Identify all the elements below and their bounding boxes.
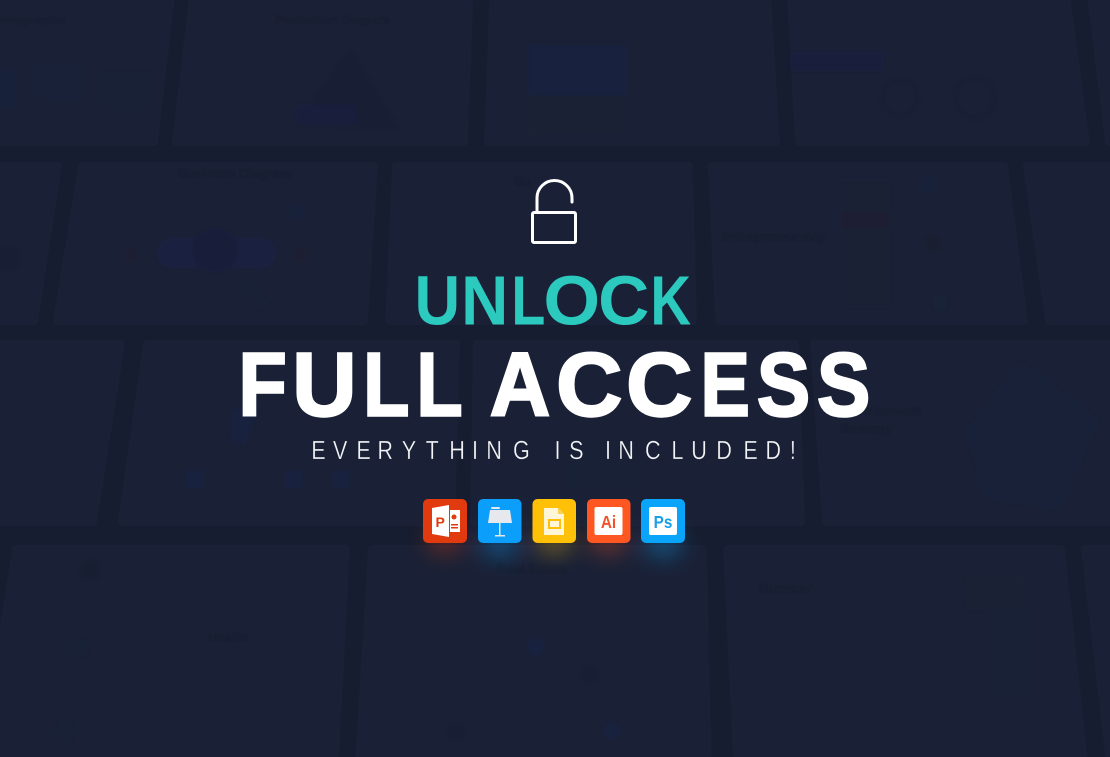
faint slide headings	[0, 13, 922, 645]
heading: full access: U	[292, 334, 356, 435]
faint slide headings: Strategy	[840, 421, 893, 436]
heading: unlock: K	[650, 262, 691, 340]
subheading: EVERYTHING IS INCLUDED!	[311, 437, 796, 465]
icon: Photoshop: Ps	[654, 512, 672, 532]
icon glows	[425, 529, 683, 559]
heading: full access: S	[817, 335, 870, 436]
heading: unlock: U	[415, 263, 460, 340]
heading: full access: F	[239, 334, 287, 435]
faint slide headings: Infographic	[0, 13, 66, 27]
heading: full access: C	[556, 335, 622, 435]
heading: full access: E	[701, 336, 750, 435]
faint slide headings: Number	[759, 580, 812, 596]
heading: unlock: C	[598, 261, 649, 339]
faint slide headings: Development	[840, 403, 922, 418]
heading: unlock: O	[543, 262, 600, 340]
faint slide headings: Business Diagram	[178, 166, 291, 181]
heading: full access: L	[416, 334, 463, 435]
faint slide headings: Health	[208, 630, 248, 645]
heading: full access	[238, 334, 870, 436]
icon: open padlock	[532, 181, 576, 242]
faint slide headings: Production Diagram	[275, 13, 390, 27]
faint slide headings: Entrepreneurship	[721, 230, 826, 244]
heading: unlock: L	[511, 262, 545, 340]
heading: full access: C	[626, 335, 692, 435]
heading: unlock	[415, 261, 691, 340]
icon: Keynote	[478, 499, 522, 543]
icon: Illustrator: Ai	[601, 512, 616, 532]
heading: full access: L	[363, 334, 409, 435]
heading: full access: A	[490, 335, 550, 435]
icon: PowerPoint	[423, 499, 467, 543]
heading: full access: S	[757, 335, 810, 436]
faint slide headings: Real Estate	[497, 561, 567, 576]
heading: unlock: N	[461, 262, 508, 340]
icon: Illustrator	[587, 499, 630, 543]
faint slide headings: Bu	[514, 174, 531, 189]
icon: Photoshop	[641, 499, 685, 543]
icon: Google Slides	[532, 499, 576, 543]
icon: PowerPoint: P	[436, 514, 445, 530]
